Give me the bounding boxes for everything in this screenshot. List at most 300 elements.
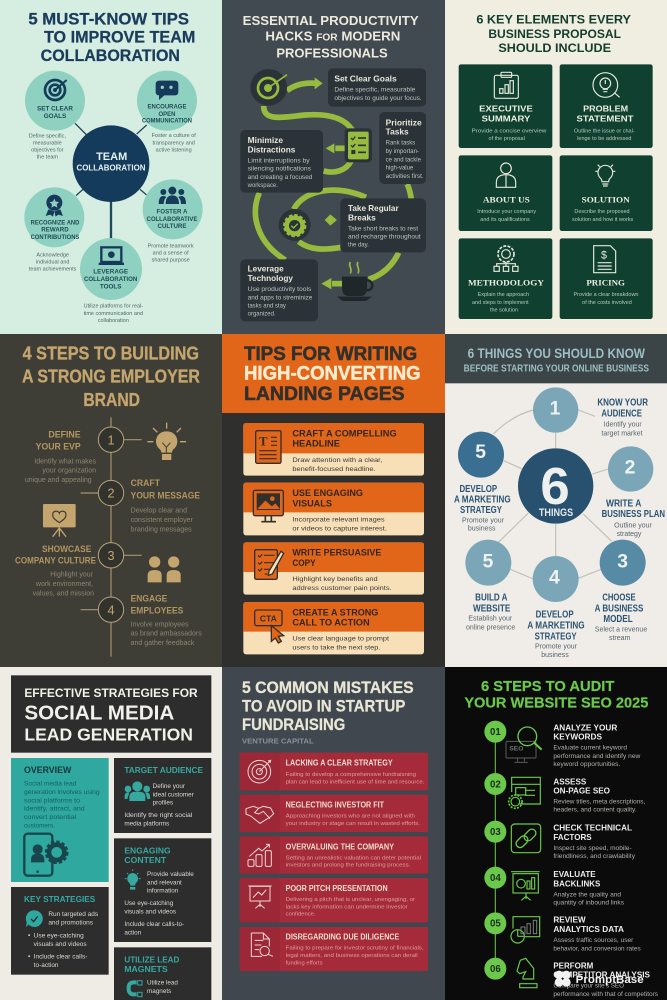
card: overview: social platforms to <box>24 797 81 804</box>
card: leverage technology: and apps to streminize <box>248 295 313 301</box>
text: encourage communication: active listening <box>156 147 192 153</box>
step numbers: 4 <box>107 603 115 617</box>
card: poor pitch: confidence. <box>286 912 316 918</box>
card: problem statement: Outline the issue or chal- <box>574 128 635 134</box>
title: website seo audit: YOUR WEBSITE SEO 2025 <box>464 696 648 712</box>
label 5 marketing <box>454 484 511 533</box>
step 5: Assess traffic sources, user <box>553 937 633 944</box>
label 5 marketing: business <box>468 526 496 533</box>
card: minimize distractions: Minimize <box>248 135 283 145</box>
step 1 text: your organization <box>42 468 96 475</box>
node: set clear goals: GOALS <box>44 113 66 120</box>
card: compelling headline: T <box>259 434 268 448</box>
panel: business proposal <box>445 0 667 334</box>
text: collaborative culture: Promote teamwork <box>148 243 194 249</box>
step 4 text: Involve employees <box>131 621 189 628</box>
step 3 <box>511 823 636 860</box>
card: engaging content: visuals and videos <box>124 908 176 915</box>
title: business proposal: 6 KEY ELEMENTS EVERY <box>476 13 632 27</box>
label 4: A MARKETING <box>527 621 585 632</box>
card: minimize distractions: silencing notifications <box>248 167 311 173</box>
card: key strategies: • <box>28 953 31 960</box>
step 3: FACTORS <box>553 832 592 842</box>
card: prioritize tasks: by importan- <box>386 149 419 155</box>
text: recognize and reward <box>29 252 77 273</box>
title: startup fundraising: TO AVOID IN STARTUP <box>242 696 405 715</box>
spokes <box>75 123 147 238</box>
step 4 text: and gather feedback <box>131 640 195 647</box>
label 2: WRITE A <box>606 498 641 509</box>
card: pricing: Provide a clear breakdown <box>574 292 638 298</box>
center circle: THINGS <box>539 507 573 519</box>
step 1 text: unique and appealing <box>25 477 92 484</box>
card: about us: and its qualifications <box>480 217 530 223</box>
card: poor pitch: POOR PITCH PRESENTATION <box>286 884 388 893</box>
text: leverage tools: time communication and <box>84 311 143 317</box>
step 3 text: work environment, <box>35 581 93 588</box>
card: pricing: $ <box>601 250 607 262</box>
card: executive summary: EXECUTIVE <box>479 103 533 113</box>
text: collaborative culture <box>148 243 194 264</box>
title: website seo audit: 6 STEPS TO AUDIT <box>481 679 615 695</box>
step 4: BACKLINKS <box>553 878 601 888</box>
header card: LEAD GENERATION <box>24 724 193 744</box>
step 2 text: branding messages <box>131 526 192 533</box>
card: key strategies: Run targeted ads <box>48 911 99 918</box>
step numbers: 3 <box>107 549 115 563</box>
center circle <box>73 125 149 202</box>
label 4 <box>527 610 585 659</box>
text: encourage communication: Foster a culture of <box>152 133 196 139</box>
card: persuasive copy: COPY <box>292 558 316 568</box>
node: collaborative culture: CULTURE <box>158 223 186 230</box>
step 2: headers, and content quality. <box>553 807 637 814</box>
label 3: Select a revenue <box>595 627 647 634</box>
step 2 text: CRAFT <box>131 478 160 488</box>
panel: team collaboration <box>0 0 222 334</box>
step 4 text: as brand ambassadors <box>131 631 202 638</box>
label 4: business <box>541 652 569 659</box>
green flow path <box>255 83 411 284</box>
numbered circles: 2 <box>625 457 635 478</box>
step 1: keyword opportunities. <box>553 761 621 768</box>
card: persuasive copy: WRITE PERSUASIVE <box>292 548 381 558</box>
step 1 text: Identify what makes <box>34 458 96 465</box>
title: business proposal: SHOULD INCLUDE <box>498 41 611 55</box>
card: prioritize tasks: high-value <box>386 166 414 172</box>
card: regular breaks: Take Regular <box>348 203 399 213</box>
label 1: target market <box>601 430 643 437</box>
card: call to action: CREATE A STRONG <box>292 607 378 617</box>
node: recognize and reward: REWARD <box>41 227 69 234</box>
card: compelling headline: Draw attention with a clear, <box>292 457 382 464</box>
title: website seo audit <box>464 679 648 712</box>
label 3 <box>595 592 647 642</box>
step 2: ON-PAGE SEO <box>553 786 611 796</box>
label 5 website: online presence <box>466 624 515 631</box>
title: employer brand <box>22 342 200 410</box>
card: problem statement: PROBLEM <box>583 103 628 113</box>
title: team collaboration <box>28 10 195 65</box>
card: leverage technology: Use productivity tools <box>248 287 311 293</box>
card: due diligence: legal matters, and business operations can derail <box>286 953 418 959</box>
label 2: Outline your <box>614 523 652 530</box>
icon: target <box>250 69 287 106</box>
card: persuasive copy: address customer pain points. <box>292 585 392 592</box>
step 3: Inspect site speed, mobile- <box>553 845 632 852</box>
card: executive summary: Provide a concise overview <box>472 128 546 134</box>
card: minimize distractions: workspace. <box>247 183 278 189</box>
card: lead magnets: UTILIZE LEAD <box>124 954 179 964</box>
timeline: 04 <box>490 873 501 884</box>
label 1 <box>597 397 648 437</box>
title: business proposal: BUSINESS PROPOSAL <box>488 27 621 41</box>
card: leverage technology: Technology <box>248 273 293 283</box>
node: encourage communication: OPEN <box>159 112 175 118</box>
step 6: performance with that of competitors <box>553 991 658 998</box>
card: key strategies <box>11 887 109 975</box>
card: solution: Describe the proposed <box>574 209 630 215</box>
card: regular breaks: Take short breaks to rest <box>348 226 418 232</box>
title: team collaboration: COLLABORATION <box>41 46 180 65</box>
timeline <box>484 721 506 980</box>
text: leverage tools: Utilize platforms for real- <box>84 304 143 310</box>
step 5 <box>511 915 641 952</box>
text: collaborative culture: shared purpose <box>152 258 190 264</box>
card: engaging content: Use eye-catching <box>124 900 174 907</box>
card: overview: convert potential <box>24 814 76 821</box>
timeline: 06 <box>490 964 501 975</box>
card: key strategies: to-action <box>34 962 59 969</box>
label 2: strategy <box>617 531 642 538</box>
step 4 text <box>131 593 202 647</box>
center circle: 6 <box>540 457 570 515</box>
card: about us: Introduce your company <box>477 209 536 215</box>
node: encourage communication: COMMUNICATION <box>142 119 192 125</box>
card: lead magnets: MAGNETS <box>124 964 168 974</box>
step 1 text <box>25 429 96 484</box>
step 1 text: YOUR EVP <box>36 442 81 452</box>
label 2 <box>602 498 665 538</box>
card: leverage technology: organized. <box>248 312 276 318</box>
card: regular breaks: the day. <box>348 243 369 249</box>
step 4: Analyze the quality and <box>553 891 622 898</box>
step 4: quantity of inbound links <box>553 899 624 906</box>
card: overview: Social media lead <box>24 781 77 788</box>
card: engaging content: information <box>147 888 179 895</box>
card: methodology <box>459 238 552 319</box>
title: landing pages: TIPS FOR WRITING <box>244 344 417 365</box>
text: leverage tools: collaboration <box>98 318 129 324</box>
card: overview: generation involves using <box>24 789 100 796</box>
node: set clear goals <box>25 71 85 131</box>
text: set clear goals: Define specific, <box>29 133 66 139</box>
card: target audience: TARGET AUDIENCE <box>124 765 203 775</box>
card: lead magnets <box>114 947 211 1000</box>
step 1: KEYWORDS <box>553 732 602 742</box>
card: overvaluing: investors and prolong the fundraising process. <box>286 863 411 869</box>
step 3: CHECK TECHNICAL <box>553 823 632 833</box>
card: investor fit <box>240 795 428 832</box>
card: overvaluing: OVERVALUING THE COMPANY <box>286 842 395 851</box>
title: productivity hacks <box>243 14 419 60</box>
card: engaging content <box>114 838 211 942</box>
card: overview <box>11 758 109 882</box>
card: target audience: Identify the right social <box>124 812 192 819</box>
card: solution: solution and how it works <box>572 217 634 223</box>
header card: EFFECTIVE STRATEGIES FOR <box>24 687 198 700</box>
card: poor pitch <box>240 878 428 922</box>
card: key strategies: KEY STRATEGIES <box>24 894 96 904</box>
card: call to action: CALL TO ACTION <box>292 618 370 628</box>
card: set clear goals: Set Clear Goals <box>334 73 397 83</box>
panel: startup fundraising <box>222 667 445 1000</box>
card: engaging visuals: USE ENGAGING <box>292 488 363 498</box>
card: set clear goals: objectives to guide your focus. <box>334 96 422 102</box>
card: solution: SOLUTION <box>582 194 630 204</box>
node: leverage tools: LEVERAGE <box>93 269 128 276</box>
card: engaging content: Include clear calls-to- <box>124 921 184 928</box>
label 5 marketing: Promote your <box>462 518 505 525</box>
card: compelling headline: CRAFT A COMPELLING <box>292 428 397 438</box>
text: encourage communication <box>152 133 196 153</box>
label 3: stream <box>609 635 631 642</box>
card: target audience: media platforms <box>124 820 169 827</box>
card: investor fit: Approaching investors who are not aligned with <box>286 814 415 820</box>
card: problem statement: STATEMENT <box>576 113 634 123</box>
card: minimize distractions <box>240 130 323 193</box>
card: lead magnets: magnets <box>147 988 171 995</box>
node: leverage tools: COLLABORATION <box>84 276 138 283</box>
text: set clear goals: measurable <box>33 141 62 147</box>
card: executive summary <box>459 64 552 148</box>
label 5 marketing: A MARKETING <box>454 495 511 506</box>
label 1: AUDIENCE <box>601 408 642 419</box>
card: problem statement <box>560 64 653 148</box>
step 5: ANALYTICS DATA <box>553 924 624 934</box>
title: employer brand: A STRONG EMPLOYER <box>22 366 200 387</box>
numbered circles <box>458 387 653 602</box>
step 1 text: DEFINE <box>48 429 81 439</box>
node: encourage communication <box>137 71 197 131</box>
panel: social media lead generation <box>0 667 222 1000</box>
node: set clear goals: SET CLEAR <box>37 105 73 112</box>
card: engaging content: ENGAGING <box>124 845 171 855</box>
card: prioritize tasks: Rank tasks <box>386 141 415 147</box>
card: pricing: PRICING <box>586 277 625 287</box>
card: executive summary: SUMMARY <box>482 113 531 123</box>
card: engaging content: action <box>124 929 142 936</box>
numbered circles: 3 <box>617 551 628 572</box>
step 5: REVIEW <box>553 915 586 925</box>
card: prioritize tasks: ce and tackle <box>386 157 422 163</box>
icon: people <box>148 556 181 582</box>
text: encourage communication: transparency and <box>152 140 195 146</box>
step 5: behavior, and conversion rates <box>553 945 641 952</box>
label 3: CHOOSE <box>602 592 636 603</box>
text: set clear goals: the team <box>37 155 58 161</box>
arrowheads <box>315 77 337 289</box>
card: leverage technology: tasks and stay <box>248 304 286 310</box>
card: due diligence: Failing to prepare for investor scrutiny of financials, <box>286 945 424 951</box>
text: collaborative culture: and a sense of <box>153 251 189 257</box>
label 5 marketing: STRATEGY <box>460 505 502 516</box>
card: overview: identify, attract, and <box>24 806 85 813</box>
card: call to action: Use clear language to prompt <box>292 636 389 643</box>
step 6: COMPETITOR ANALYSIS <box>553 970 650 980</box>
card: minimize distractions: Distractions <box>248 144 296 154</box>
numbered circles: 1 <box>550 399 561 420</box>
numbered circles: 5 <box>475 442 486 463</box>
card: due diligence <box>240 927 428 971</box>
title: employer brand: 4 STEPS TO BUILDING <box>23 342 199 363</box>
card: lacking strategy <box>240 753 428 790</box>
step 3 text: COMPANY CULTURE <box>15 556 96 566</box>
watermark <box>555 971 644 987</box>
card: target audience: Define your <box>153 783 185 790</box>
text: recognize and reward: individual and <box>36 260 69 266</box>
title: business proposal <box>476 13 632 55</box>
node: collaborative culture: FOSTER A <box>157 209 188 216</box>
card: prioritize tasks <box>379 112 426 184</box>
card: regular breaks: Breaks <box>348 212 376 222</box>
card: engaging visuals: Incorporate relevant images <box>292 517 385 524</box>
node: recognize and reward: RECOGNIZE AND <box>31 219 80 226</box>
header card <box>11 675 211 753</box>
title: team collaboration: 5 MUST-KNOW TIPS <box>28 10 189 29</box>
label 3: MODEL <box>603 614 633 625</box>
step 3 text: SHOWCASE <box>42 544 91 554</box>
step 4: EVALUATE <box>553 869 596 879</box>
card: due diligence: funding efforts <box>286 960 323 966</box>
text: set clear goals <box>29 133 66 161</box>
step 6: PERFORM <box>553 960 593 970</box>
card: lacking strategy: LACKING A CLEAR STRATEGY <box>286 759 393 768</box>
center circle: TEAM <box>96 151 127 163</box>
center circle <box>518 448 593 524</box>
card: about us: ABOUT US <box>483 194 530 204</box>
card: leverage technology <box>240 259 318 321</box>
card: target audience: profiles <box>153 800 173 807</box>
card: key strategies: Include clear calls- <box>34 953 87 960</box>
label 4: Promote your <box>535 644 578 651</box>
card: engaging visuals: VISUALS <box>292 498 332 508</box>
step 2 <box>509 776 646 814</box>
card: overvaluing: Setting an unrealistic valuation can deter potential <box>286 855 421 861</box>
card: lacking strategy: Failing to develop a comprehensive fundraisning <box>286 772 416 778</box>
step 3: friendliness, and crawlability <box>553 853 636 860</box>
card: regular breaks <box>340 198 426 252</box>
step 3 text: Highlight your <box>50 572 94 579</box>
step 2 text <box>131 478 200 533</box>
label 5 website: WEBSITE <box>473 603 511 614</box>
panel: website seo audit <box>445 667 667 1000</box>
card: poor pitch: Delivering a pitch that is unclear, unengaging, or <box>286 897 415 903</box>
title: productivity hacks: ESSENTIAL PRODUCTIVITY <box>243 14 419 28</box>
card: compelling headline <box>243 423 424 476</box>
label 1: Identify your <box>604 422 642 429</box>
title: startup fundraising <box>242 678 414 734</box>
card: poor pitch: lacks key information can undermine investor <box>286 904 408 910</box>
card: target audience <box>114 758 211 833</box>
node: leverage tools <box>80 238 142 300</box>
card: engaging content: Provide valuable <box>147 871 194 878</box>
label 5 website: Establish your <box>468 616 513 623</box>
node: collaborative culture: COLLABORATIVE <box>147 216 197 223</box>
card: minimize distractions: and creating a focused <box>248 175 312 181</box>
step 1: ANALYZE YOUR <box>553 722 617 732</box>
card: methodology: and steps to implement <box>472 300 529 306</box>
icon: coffee cup <box>337 262 372 301</box>
card: regular breaks: and recharge throughout <box>348 235 421 241</box>
card: minimize distractions: Limit interruptions by <box>248 158 310 164</box>
card: investor fit: NEGLECTING INVESTOR FIT <box>286 801 384 810</box>
card: overview: OVERVIEW <box>24 765 72 775</box>
title: online business <box>464 345 649 375</box>
step 6: Compare your site's SEO <box>553 982 624 989</box>
icon: presentation heart <box>43 504 76 537</box>
text: recognize and reward: Acknowledge <box>36 252 69 258</box>
icon: lightbulb <box>147 423 186 460</box>
step 2: Review titles, meta descriptions, <box>553 799 646 806</box>
card: compelling headline: HEADLINE <box>292 439 340 449</box>
card: key strategies: visuals and videos <box>34 941 87 948</box>
timeline <box>81 417 142 657</box>
card: methodology: the solution <box>490 308 518 314</box>
step 2 text: YOUR MESSAGE <box>131 491 200 501</box>
label 4: DEVELOP <box>536 610 574 621</box>
icon: gear <box>279 209 311 241</box>
panel: landing pages <box>222 334 445 667</box>
node: recognize and reward: CONTRIBUTIONS <box>31 234 79 241</box>
card: key strategies: and promotions <box>48 919 94 926</box>
card: engaging visuals: or videos to capture interest. <box>292 526 387 533</box>
card: target audience: ideal customer <box>153 791 194 798</box>
step 6 <box>517 958 658 998</box>
card: call to action <box>243 602 424 654</box>
step numbers: 1 <box>107 433 115 447</box>
label 5 marketing: DEVELOP <box>459 484 498 495</box>
header card: SOCIAL MEDIA <box>24 702 174 725</box>
card: pricing: of the costs involved <box>582 300 632 306</box>
card: about us <box>459 155 552 231</box>
center circle: COLLABORATION <box>76 162 145 172</box>
panel: employer brand <box>0 334 222 667</box>
card: pricing <box>560 238 653 319</box>
node: encourage communication: ENCOURAGE <box>148 105 186 111</box>
title: team collaboration: TO IMPROVE TEAM <box>44 28 195 47</box>
card: key strategies: Use eye-catching <box>34 932 84 939</box>
card: problem statement: lenge to be addressed <box>577 136 631 142</box>
connecting lines <box>493 410 612 579</box>
title: startup fundraising: FUNDRAISING <box>242 715 345 734</box>
card: persuasive copy <box>243 542 424 595</box>
label 1: KNOW YOUR <box>597 397 648 408</box>
label 5 website <box>466 592 515 631</box>
step 1: Evaluate current keyword <box>553 745 628 752</box>
text: recognize and reward: team achievements <box>29 267 77 273</box>
card: investor fit: your industry or stage can result in wasted efforts. <box>286 821 420 827</box>
step 1: SEO <box>509 745 523 752</box>
card: set clear goals: Define specific, measurable <box>334 88 416 94</box>
card: lacking strategy: plan can lead to inefficient use of time and resource. <box>286 779 425 785</box>
step 1: performance and identify new <box>553 753 641 760</box>
step 4 <box>511 869 624 906</box>
card: engaging content: CONTENT <box>124 855 167 865</box>
card: methodology: METHODOLOGY <box>468 277 545 287</box>
step 4 text: EMPLOYEES <box>131 606 183 616</box>
step 3 text: values, and mission <box>33 590 94 597</box>
